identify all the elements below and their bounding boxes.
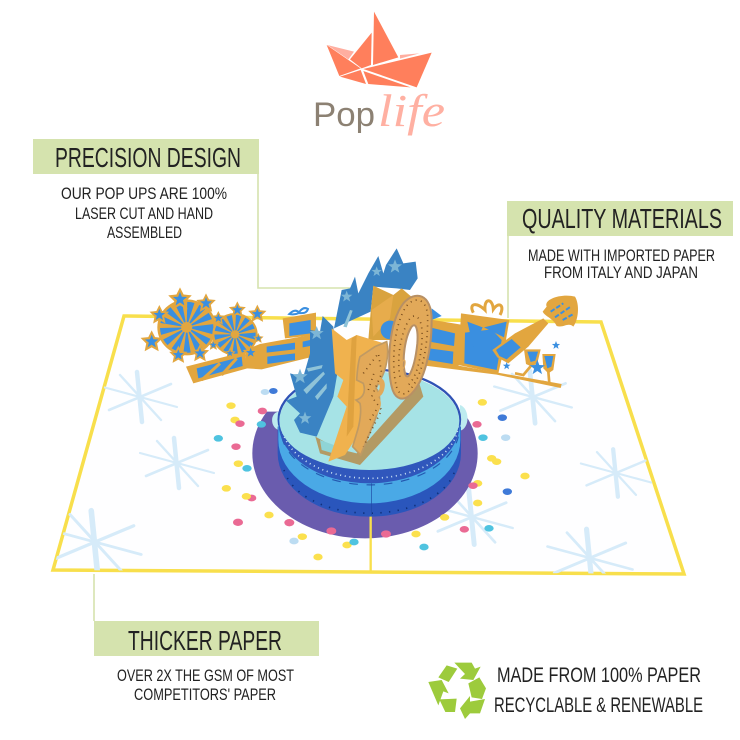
lace dots [282, 423, 458, 478]
open card base [53, 316, 684, 574]
logo: Poplife [313, 12, 445, 136]
connector line: thicker paper [93, 574, 95, 621]
cut-out number 3 [353, 342, 391, 455]
large gift box [458, 301, 509, 373]
gold panels and base [315, 286, 423, 465]
cut-out number 0: 0 [400, 358, 407, 373]
purple disc [252, 412, 478, 538]
description: FROM ITALY AND JAPAN [544, 264, 698, 282]
connector line: precision design [258, 174, 352, 288]
fireworks [157, 299, 216, 355]
cake top [279, 371, 459, 470]
small side tabs [272, 405, 467, 431]
connector line: quality materials [507, 236, 509, 318]
gift box with diagonal stripes [186, 352, 247, 383]
perforation dots on numbers [363, 300, 428, 447]
cut-out number 0 [389, 296, 432, 399]
description [117, 667, 294, 704]
left strip: fireworks and gifts [141, 287, 316, 383]
pop-up card photo [49, 248, 684, 587]
description: COMPETITORS' PAPER [134, 686, 276, 704]
icon: origami boat [327, 12, 432, 87]
right strip: gifts and champagne [420, 296, 578, 388]
cake [278, 369, 461, 517]
heading band [33, 139, 259, 174]
snowflake prints [49, 371, 651, 587]
central pop-up scene [141, 248, 578, 572]
description [528, 247, 715, 282]
callout: precision design [33, 139, 259, 242]
recycled paper statement [494, 664, 703, 717]
description: ASSEMBLED [107, 224, 182, 242]
blue bow behind [432, 308, 442, 320]
blue stars [530, 360, 545, 374]
card centre fold [367, 515, 374, 572]
gift box with bands [420, 318, 463, 367]
hole pattern [284, 470, 455, 513]
base strip [423, 359, 562, 388]
champagne bottle [492, 296, 578, 363]
gift box with bands [245, 335, 310, 369]
light blue wave band [278, 425, 460, 503]
icon: recycling arrows [428, 663, 486, 719]
description: LASER CUT AND HAND [75, 205, 213, 223]
wave ticks [282, 437, 458, 485]
cake base, dark blue [278, 427, 461, 517]
cut-out number 3: 3 [358, 364, 391, 430]
heading band: PRECISION DESIGN [55, 142, 241, 173]
back lace rim [279, 369, 460, 469]
description: OVER 2X THE GSM OF MOST [117, 667, 294, 685]
wordmark: Pop [313, 96, 375, 134]
callout: thicker paper [94, 621, 319, 704]
upper flame [334, 248, 418, 328]
side seam [371, 483, 373, 515]
confetti [214, 388, 530, 560]
description: OUR POP UPS ARE 100% [61, 185, 227, 203]
heading band: THICKER PAPER [128, 625, 282, 656]
dark lace band [279, 420, 460, 483]
champagne glasses [515, 349, 556, 383]
stars [168, 287, 192, 310]
blue flame backdrop [286, 248, 418, 437]
lower flame [286, 316, 337, 437]
heading band [94, 621, 319, 656]
description [61, 185, 227, 242]
wordmark: life [378, 85, 445, 136]
callout: quality materials [507, 201, 733, 282]
top gift box [283, 308, 316, 338]
